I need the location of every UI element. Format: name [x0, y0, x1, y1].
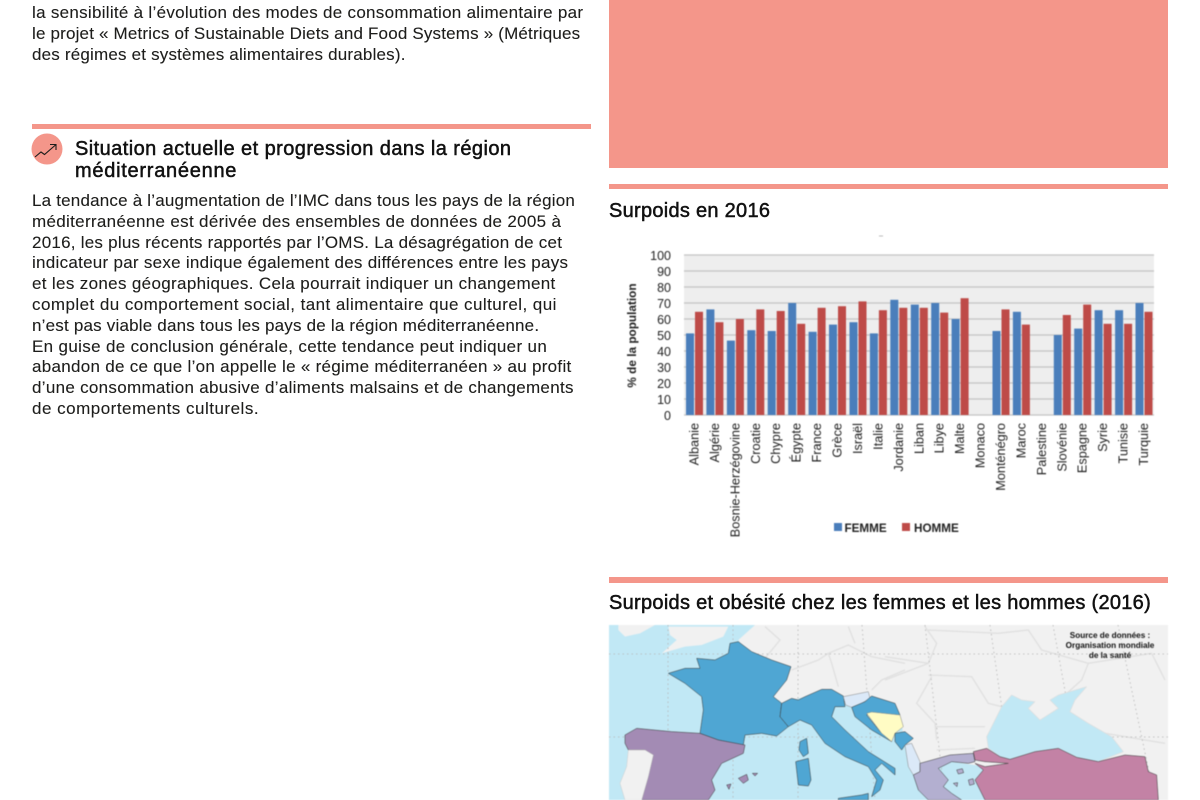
- heading: current situation: Situation actuelle et progression dans la région: [75, 138, 511, 160]
- country labels: Liban: [912, 423, 926, 454]
- Bosnia and Herzegovina: [867, 712, 903, 742]
- Italy: [780, 689, 895, 797]
- country labels: Monténégro: [994, 423, 1008, 491]
- y axis labels: [650, 249, 671, 423]
- map: overweight and obesity in the Mediterranean: [608, 624, 1168, 800]
- Slovenia: [843, 692, 870, 707]
- country labels: Albanie: [688, 423, 702, 465]
- y axis title: % de la population: [625, 283, 639, 388]
- country labels: Italie: [871, 423, 885, 450]
- text block: current situation: [32, 191, 575, 418]
- text block: current situation: En guise de conclusion générale, cette tendance peut indiquer un: [32, 337, 547, 356]
- y axis labels: 50: [657, 329, 671, 343]
- sea areas: [609, 625, 985, 800]
- Corsica: [799, 738, 808, 757]
- heading: overweight 2016: Surpoids en 2016: [609, 200, 770, 222]
- country labels: Syrie: [1096, 423, 1110, 452]
- country labels: Grèce: [830, 423, 844, 458]
- y axis labels: 100: [650, 249, 671, 263]
- y axis labels: 30: [657, 361, 671, 375]
- male bars: [695, 298, 1152, 415]
- text block: current situation: complet du comportement social, tant alimentaire que culturel, qui: [32, 295, 557, 314]
- borders: [765, 627, 905, 690]
- country labels: Maroc: [1014, 422, 1028, 458]
- Greece and North Macedonia: [913, 753, 975, 800]
- Aegean islands: [953, 769, 974, 787]
- Spain: [625, 728, 745, 800]
- graticule: [609, 625, 1168, 800]
- country labels: Monaco: [974, 423, 988, 468]
- Montenegro: [895, 732, 913, 750]
- y axis labels: 40: [657, 345, 671, 359]
- y axis labels: 0: [664, 409, 671, 423]
- text block: current situation: 2016, les plus récents rapportés par l’OMS. La désagrégation de cet: [32, 233, 562, 252]
- female bars: [686, 300, 1144, 415]
- western countries: [620, 642, 903, 800]
- y axis labels: 20: [657, 377, 671, 391]
- country labels: Tunisie: [1117, 423, 1131, 463]
- y axis labels: 80: [657, 281, 671, 295]
- country labels: Espagne: [1076, 423, 1090, 473]
- legend: FEMME: [844, 522, 887, 535]
- text block: current situation: n’est pas viable dans tous les pays de la région méditerranéenne.: [32, 316, 539, 335]
- Sicily: [838, 793, 868, 800]
- data source note: Source de données :: [1070, 631, 1150, 640]
- y axis labels: 70: [657, 297, 671, 311]
- heading: current situation: [75, 138, 511, 182]
- France: [668, 642, 791, 745]
- country labels: Israël: [851, 423, 865, 454]
- country labels: Algérie: [708, 423, 722, 462]
- text block: intro paragraph end: la sensibilité à l’évolution des modes de consommation alimentaire par: [32, 3, 583, 22]
- country labels: Chypre: [769, 423, 783, 464]
- Albania: [905, 743, 920, 775]
- country labels: Turquie: [1137, 423, 1151, 466]
- Sardinia: [796, 758, 811, 786]
- country labels: France: [810, 423, 824, 462]
- y axis labels: 60: [657, 313, 671, 327]
- divider: current situation section: [32, 124, 591, 129]
- data source note: de la santé: [1089, 651, 1132, 660]
- panel: coral colour block: [609, 0, 1168, 168]
- Turkey: [973, 748, 1158, 800]
- text block: current situation: de comportements culturels.: [32, 399, 259, 418]
- country labels: Bosnie-Herzégovine: [728, 423, 742, 537]
- divider: map section: [609, 577, 1168, 583]
- data source note: Organisation mondiale: [1066, 641, 1155, 650]
- country labels: Slovénie: [1055, 423, 1069, 472]
- heading: overweight and obesity map: Surpoids et obésité chez les femmes et les hommes (2016): [609, 592, 1151, 614]
- text block: intro paragraph end: [32, 3, 583, 64]
- legend: HOMME: [914, 522, 959, 535]
- text block: current situation: abandon de ce que l’on appelle le « régime méditerranéen » au profit: [32, 357, 572, 376]
- country labels: Jordanie: [892, 423, 906, 472]
- y axis labels: 90: [657, 265, 671, 279]
- divider: overweight chart section: [609, 184, 1168, 189]
- text block: current situation: méditerranéenne est dérivée des ensembles de données de 2005 à: [32, 212, 561, 231]
- icon: upward trend: [32, 134, 62, 164]
- y axis labels: 10: [657, 393, 671, 407]
- Balearic islands: [727, 773, 758, 789]
- Black Sea: [987, 687, 1123, 762]
- country labels: Croatie: [749, 423, 763, 464]
- text block: current situation: d’une consommation abusive d’aliments malsains et de changements: [32, 378, 574, 397]
- legend: [834, 522, 959, 535]
- bar chart: overweight by country and sex: [625, 235, 1154, 538]
- country labels: Égypte: [789, 423, 804, 462]
- text block: current situation: indicateur par sexe indique également des différences entre les pays: [32, 253, 568, 272]
- Portugal: [620, 750, 653, 800]
- data source note: [1066, 631, 1155, 660]
- country labels: [688, 422, 1151, 537]
- text block: current situation: et les zones géographiques. Cela pourrait indiquer un changement: [32, 274, 556, 293]
- country labels: Palestine: [1035, 423, 1049, 475]
- Croatia: [852, 696, 900, 742]
- text block: intro paragraph end: le projet « Metrics of Sustainable Diets and Food Systems » (Métriques: [32, 24, 580, 43]
- heading: current situation: méditerranéenne: [75, 160, 237, 182]
- country labels: Libye: [933, 423, 947, 453]
- text block: intro paragraph end: des régimes et systèmes alimentaires durables).: [32, 45, 406, 64]
- text block: current situation: La tendance à l’augmentation de l’IMC dans tous les pays de la région: [32, 191, 575, 210]
- country labels: Malte: [953, 423, 967, 454]
- eastern countries: [895, 687, 1158, 800]
